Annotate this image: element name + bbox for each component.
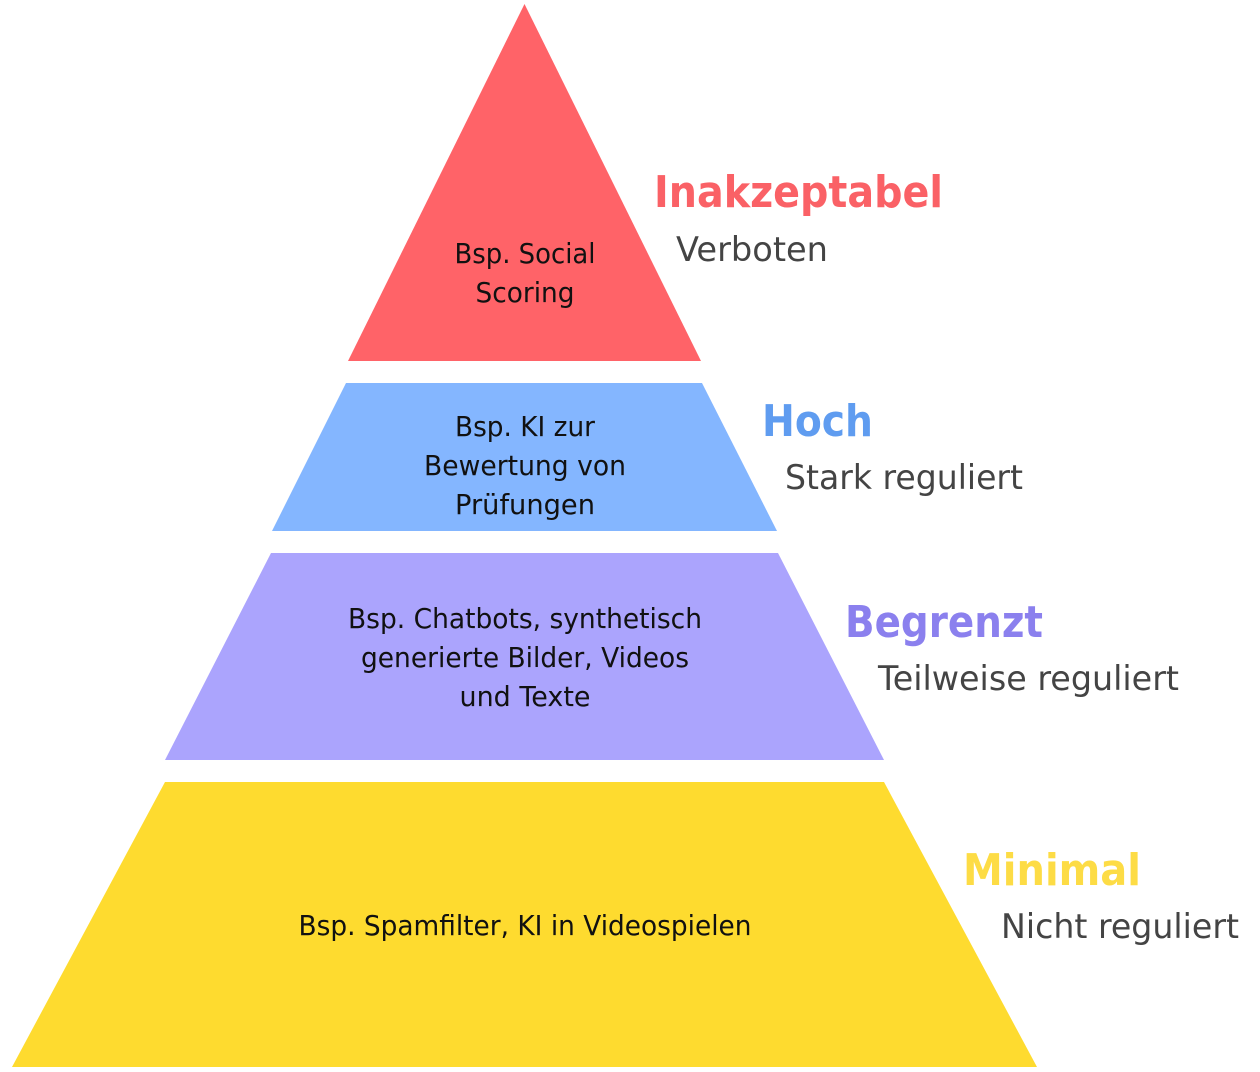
example text: chatbots: generierte Bilder, Videos (361, 642, 689, 674)
tier: high (272, 383, 1023, 531)
example text: spam filter: Bsp. Spamfilter, KI in Videospielen (298, 910, 752, 942)
example text: exam assessment (424, 411, 626, 521)
example text: exam assessment: Bewertung von (424, 450, 626, 482)
purple trapezoid (165, 553, 884, 760)
example text: chatbots: Bsp. Chatbots, synthetisch (348, 603, 702, 635)
example text: chatbots: und Texte (460, 681, 590, 713)
example text: social scoring (454, 238, 596, 309)
example text: chatbots (348, 603, 702, 713)
label: Begrenzt: Begrenzt (845, 597, 1043, 648)
example text: exam assessment: Bsp. KI zur (455, 411, 596, 443)
example text: social scoring: Scoring (476, 277, 574, 309)
tier: minimal (12, 782, 1239, 1067)
label: Hoch: Hoch (762, 396, 873, 447)
sublabel: Teilweise reguliert: Teilweise reguliert (877, 659, 1179, 699)
label: Minimal: Minimal (963, 845, 1141, 896)
sublabel: Stark reguliert: Stark reguliert (785, 458, 1023, 498)
red triangle (348, 4, 701, 361)
sublabel: Nicht reguliert: Nicht reguliert (1001, 907, 1239, 947)
label: Inakzeptabel: Inakzeptabel (654, 167, 943, 218)
yellow trapezoid (12, 782, 1037, 1067)
example text: exam assessment: Prüfungen (455, 489, 595, 521)
tier: unacceptable (348, 4, 943, 361)
blue trapezoid (272, 383, 777, 531)
example text: social scoring: Bsp. Social (454, 238, 596, 270)
tier: limited (165, 553, 1179, 760)
sublabel: Verboten: Verboten (676, 230, 828, 270)
